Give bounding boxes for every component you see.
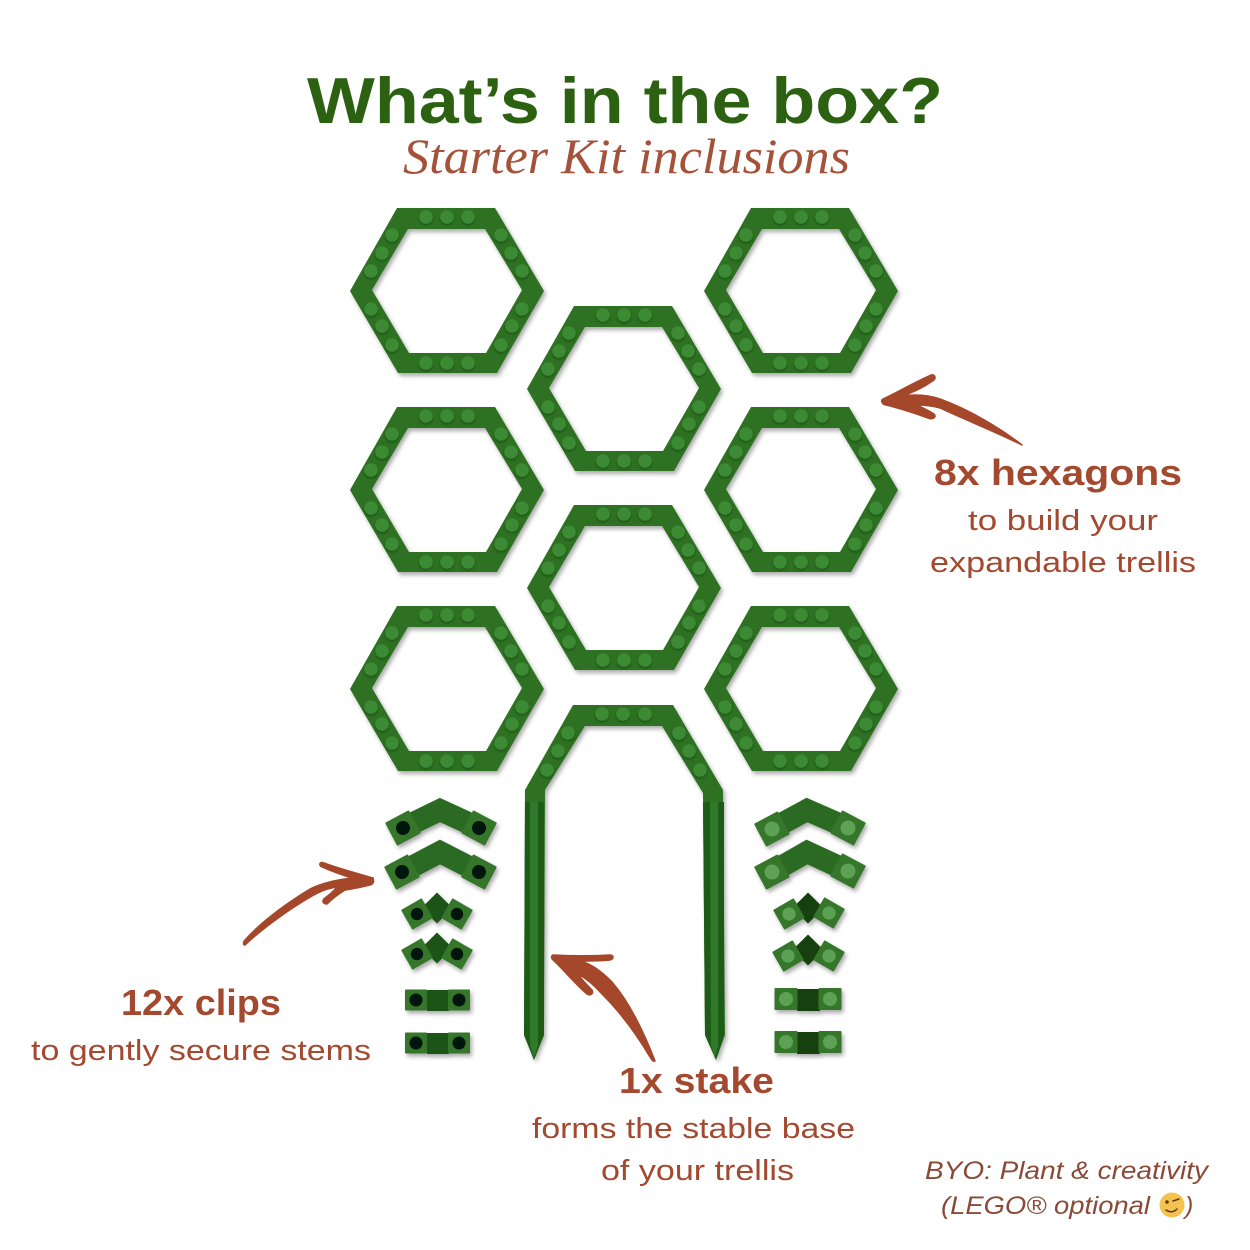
note: bring your own: (LEGO® optional (941, 1192, 1152, 1220)
hexagon: top right (704, 208, 898, 373)
arrow: to hexagons (882, 375, 1022, 445)
hexagon: middle right (704, 407, 898, 572)
hexagon: middle left (350, 407, 544, 572)
clips: left column (384, 810, 497, 1054)
hexagon: bottom right (704, 606, 898, 771)
note: bring your own: BYO: Plant & creativity (925, 1157, 1210, 1185)
hexagon: lower middle (527, 505, 721, 670)
label: hexagons (930, 452, 1196, 579)
label: stake: forms the stable base (532, 1113, 855, 1145)
hexagon: bottom left (350, 606, 544, 771)
icon: winking face (1160, 1192, 1184, 1218)
label: clips: 12x clips (121, 982, 281, 1023)
hexagon: upper middle (527, 306, 721, 471)
clips: right column (754, 810, 866, 1054)
title: What’s in the box? (307, 64, 943, 137)
label: hexagons: expandable trellis (930, 547, 1196, 579)
hexagon: top left (350, 208, 544, 373)
label: clips: to gently secure stems (31, 1035, 371, 1067)
label: hexagons: to build your (968, 505, 1158, 537)
stake (524, 705, 725, 1060)
label: stake (532, 1060, 855, 1187)
label: stake: of your trellis (601, 1155, 794, 1187)
label: clips (31, 982, 371, 1067)
subtitle: Starter Kit inclusions (403, 128, 850, 184)
arrow: to clips (244, 862, 374, 945)
label: stake: 1x stake (619, 1060, 774, 1101)
note: bring your own: ) (1182, 1192, 1193, 1220)
note: bring your own (925, 1157, 1210, 1220)
arrow: to stake (552, 955, 655, 1061)
label: hexagons: 8x hexagons (934, 452, 1182, 493)
